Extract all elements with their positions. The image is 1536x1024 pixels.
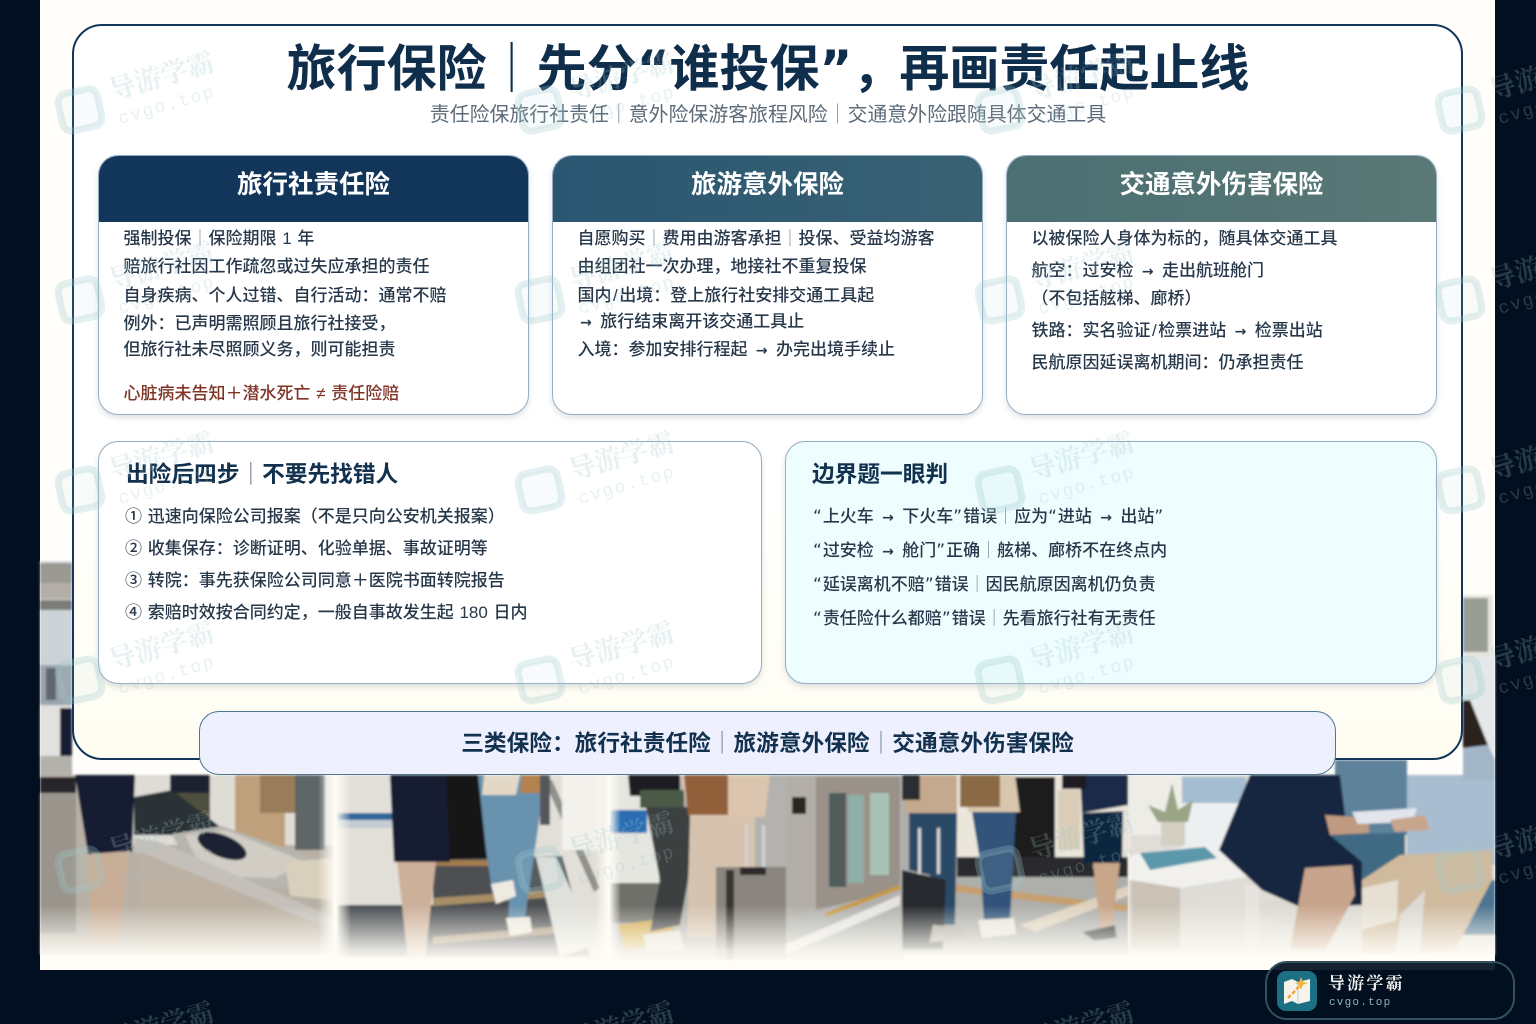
list: boundary questions (813, 506, 1167, 628)
text: transport accident insurance: 以被保险人身体为标的，随具体交通工具 (1032, 228, 1338, 248)
text: travel accident insurance (578, 228, 934, 358)
text: transport accident insurance: → (1142, 264, 1154, 280)
heading: boundary questions: 边界题一眼判 (812, 461, 948, 487)
text: travel accident insurance: 由组团社一次办理，地接社不重复投保 (578, 256, 866, 276)
watermark layer: 导游学霸 (1023, 420, 1138, 488)
logo name: 导游学霸 (1328, 969, 1405, 994)
watermark layer: 导游学霸 (103, 610, 218, 678)
watermark layer: 导游学霸 (563, 230, 678, 298)
logo badge (1265, 961, 1515, 1020)
watermark layer: cvgo.top (116, 843, 218, 890)
watermark layer: cvgo.top (116, 463, 218, 510)
logo url: cvgo.top (1329, 997, 1391, 1009)
list: four steps: ① 迅速向保险公司报案（不是只向公安机关报案） (125, 506, 505, 526)
heading: transport accident insurance: 交通意外伤害保险 (1119, 171, 1324, 199)
scene 4 bus (902, 775, 1130, 955)
watermark layer: cvgo.top (1036, 843, 1138, 890)
text: travel agency liability (124, 228, 446, 402)
panel: travel accident insurance (552, 155, 983, 415)
list: boundary questions: → (882, 510, 894, 526)
watermark layer: 导游学霸 (103, 230, 218, 298)
icon: folded map with star (1277, 971, 1317, 1011)
watermark layer: cvgo.top (116, 83, 218, 130)
list: boundary questions: “延误离机不赔”错误｜因民航原因离机仍负责 (813, 574, 1156, 594)
watermark layer: cvgo.top (1036, 653, 1138, 700)
text: travel accident insurance: 自愿购买｜费用由游客承担｜投保、受益均游客 (578, 228, 934, 248)
panel: four steps after an accident (98, 441, 762, 684)
text: transport accident insurance: 民航原因延误离机期间：仍承担责任 (1032, 352, 1304, 372)
heading: travel accident insurance (553, 156, 982, 222)
text: travel accident insurance: 入境：参加安排行程起 办完出境手续止 (578, 340, 895, 358)
text: travel accident insurance: 国内/出境：登上旅行社安排交通工具起 (578, 286, 874, 304)
main panel (72, 24, 1463, 760)
watermark layer: 导游学霸 (103, 40, 218, 108)
text: travel accident insurance: 旅行结束离开该交通工具止 (600, 312, 804, 330)
watermark layer: 导游学霸 (1023, 230, 1138, 298)
heading: travel agency liability: 旅行社责任险 (237, 171, 390, 199)
list: boundary questions: → (882, 544, 894, 560)
watermark layer: cvgo.top (1036, 273, 1138, 320)
text: transport accident insurance: → (1235, 324, 1246, 340)
watermark layer: 导游学霸 (103, 420, 218, 488)
watermark layer: 导游学霸 (103, 800, 218, 868)
text: travel accident insurance: → (756, 342, 768, 358)
watermark layer: cvgo.top (576, 653, 678, 700)
summary strip (199, 711, 1336, 775)
watermark layer: cvgo.top (1036, 463, 1138, 510)
list: boundary questions: “责任险什么都赔”错误｜先看旅行社有无责任 (813, 608, 1156, 628)
watermark layer: cvgo.top (1036, 83, 1138, 130)
watermark layer: cvgo.top (116, 653, 218, 700)
panel edge fades (40, 905, 1495, 965)
text: travel agency liability: 但旅行社未尽照顾义务，则可能担责 (124, 340, 396, 358)
left strip above band (40, 561, 72, 775)
list: four steps: ③ 转院：事先获保险公司同意＋医院书面转院报告 (125, 570, 505, 590)
text: transport accident insurance: 铁路：实名验证/检票进站 检票出站 (1032, 320, 1323, 340)
scene 5 sofa room (1128, 775, 1495, 955)
watermark layer: cvgo.top (576, 843, 678, 890)
watermark layer: 导游学霸 (1023, 40, 1138, 108)
panel: travel agency liability (98, 155, 529, 415)
watermark layer: cvgo.top (576, 83, 678, 130)
text: transport accident insurance (1032, 228, 1338, 372)
list: four steps: ② 收集保存：诊断证明、化验单据、事故证明等 (125, 538, 488, 558)
text: transport accident insurance: （不包括舷梯、廊桥） (1032, 288, 1202, 308)
heading: transport accident insurance (1007, 156, 1436, 222)
watermark layer: 导游学霸 (563, 610, 678, 678)
text: travel agency liability: 例外：已声明需照顾且旅行社接受， (124, 314, 396, 332)
panel: transport accident insurance (1006, 155, 1437, 415)
subtitle: 责任险保旅行社责任｜意外险保游客旅程风险｜交通意外险跟随具体交通工具 (430, 104, 1106, 126)
heading: four steps: 出险后四步｜不要先找错人 (126, 461, 398, 487)
summary strip: 三类保险：旅行社责任险｜旅游意外保险｜交通意外伤害保险 (461, 730, 1074, 756)
text: travel agency liability: 心脏病未告知＋潜水死亡 ≠ 责任险赔 (124, 384, 399, 402)
text: travel agency liability: 强制投保｜保险期限 1 年 (124, 228, 314, 248)
title: 旅行保险｜先分“谁投保”，再画责任起止线 (287, 40, 1249, 98)
heading: travel agency liability (99, 156, 528, 222)
panel: boundary questions (785, 441, 1437, 684)
list: four steps: ④ 索赔时效按合同约定，一般自事故发生起 180 日内 (125, 602, 528, 622)
list: boundary questions: → (1100, 510, 1112, 526)
scene 2 train stairs (335, 775, 610, 960)
list: boundary questions: “过安检 舱门”正确｜舷梯、廊桥不在终点内 (813, 540, 1167, 560)
watermark layer: cvgo.top (116, 273, 218, 320)
text: travel accident insurance: → (580, 314, 592, 330)
watermark layer: 导游学霸 (1023, 800, 1138, 868)
watermark layer: cvgo.top (576, 273, 678, 320)
watermark layer: cvgo.top (576, 463, 678, 510)
list: boundary questions: “上火车 下火车”错误｜应为“进站 出站” (813, 506, 1164, 526)
right strip above band (1463, 657, 1495, 775)
watermark layer: 导游学霸 (1023, 610, 1138, 678)
watermark layer: 导游学霸 (563, 800, 678, 868)
scene 1 security (40, 775, 335, 955)
text: travel agency liability: 赔旅行社因工作疏忽或过失应承担的责任 (124, 256, 430, 276)
heading: travel accident insurance: 旅游意外保险 (691, 171, 844, 199)
text: transport accident insurance: 航空：过安检 走出航班舱门 (1032, 260, 1264, 280)
scene 3 gate (609, 775, 904, 960)
watermark layer: 导游学霸 (563, 420, 678, 488)
text: travel agency liability: 自身疾病、个人过错、自行活动：通常不赔 (124, 286, 446, 304)
watermark layer: 导游学霸 (563, 40, 678, 108)
list: four steps (125, 506, 528, 622)
